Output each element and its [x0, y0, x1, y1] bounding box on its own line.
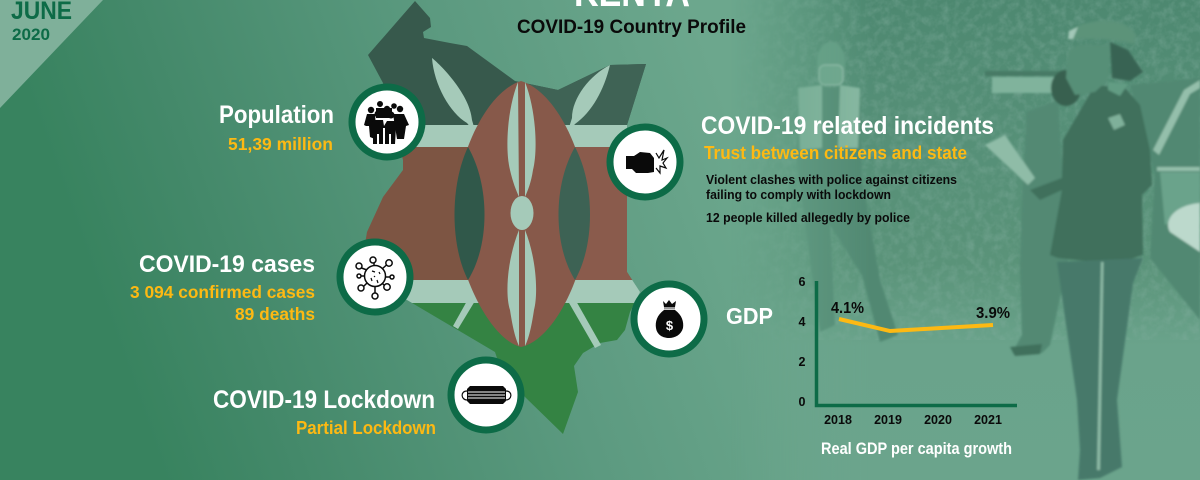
spears: [432, 58, 476, 134]
line chart: GDP: 2: [799, 355, 806, 369]
year label: 2020: [12, 25, 50, 44]
Maasai shield: [455, 81, 588, 347]
population block: 51,39 million: [228, 134, 333, 154]
hut: [992, 77, 1070, 93]
icon: face mask: [451, 360, 521, 430]
icon: virus: [340, 242, 410, 312]
covid cases block: COVID-19 cases: [139, 251, 315, 278]
GDP label: GDP: [726, 303, 773, 329]
covid cases block: 3 094 confirmed cases: [130, 282, 315, 302]
vehicle: [1130, 78, 1200, 320]
line chart: GDP: 0: [799, 395, 806, 409]
incidents block: COVID-19 related incidents: [701, 112, 994, 140]
incidents block: [701, 112, 994, 225]
population block: [219, 101, 334, 154]
icon: money bag: [634, 284, 704, 354]
icon: fist: [610, 127, 680, 197]
incidents block: 12 people killed allegedly by police: [706, 210, 910, 225]
incidents block: Violent clashes with police against citizens: [706, 172, 957, 187]
line chart: GDP: 2018: [824, 413, 852, 427]
line chart: GDP: 6: [799, 275, 806, 289]
icon: population: [352, 87, 422, 157]
covid cases block: [130, 251, 315, 324]
lockdown block: COVID-19 Lockdown: [213, 386, 435, 414]
line chart: GDP: 4.1%: [831, 300, 864, 317]
line chart: GDP: 2021: [974, 413, 1002, 427]
line chart: GDP: [799, 275, 1017, 458]
incidents block: Trust between citizens and state: [704, 142, 967, 163]
date corner triangle: [0, 0, 103, 108]
line chart: GDP: 4: [799, 315, 806, 329]
subtitle: COVID-19 Country Profile: [517, 17, 746, 38]
line chart: GDP: Real GDP per capita growth: [821, 440, 1012, 458]
man with vest: [795, 88, 898, 342]
lockdown block: [213, 386, 436, 438]
line chart: GDP: 2019: [874, 413, 902, 427]
person behind: [1016, 102, 1066, 353]
covid cases block: 89 deaths: [235, 304, 315, 324]
map of Kenya with flag: [350, 0, 650, 443]
population block: Population: [219, 101, 334, 129]
incidents block: failing to comply with lockdown: [706, 187, 891, 202]
line chart: GDP: 3.9%: [976, 305, 1010, 322]
icon: money bag: $: [666, 318, 674, 333]
clipboard: [985, 135, 1035, 185]
officer: [1030, 85, 1152, 264]
line chart: GDP: 2020: [924, 413, 952, 427]
lockdown block: Partial Lockdown: [296, 417, 436, 438]
background photo: police officers: [730, 0, 1200, 480]
